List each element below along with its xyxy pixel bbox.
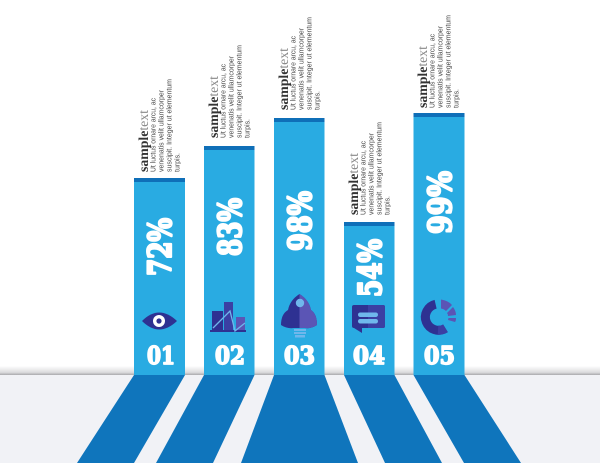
bar 1: 72% [134,178,185,375]
icon: rocket light bulb [281,294,317,338]
caption 2: venenatis velit ullamcorper [228,55,236,138]
caption 4: Ut luctus ornare arcu, ac [360,141,368,215]
caption 4 [347,122,392,215]
caption 1: venenatis velit ullamcorper [158,89,166,172]
icon: bar chart with trend line [210,302,246,332]
caption 2: suscipit. Integer ut elementum [236,45,244,138]
number 02: 02 [215,341,245,370]
caption 1: suscipit. Integer ut elementum [166,79,174,172]
caption 1: turpis. [174,153,182,172]
floor [0,366,600,463]
caption 4: venenatis velit ullamcorper [368,132,376,215]
icon: eye [142,312,177,330]
caption 5: Ut luctus ornare arcu, ac [430,34,436,108]
caption 2 [207,45,252,138]
caption 4: turpis. [384,196,392,215]
caption 4: suscipit. Integer ut elementum [376,122,384,215]
number 05: 05 [424,341,455,370]
floor shadows of bars [77,375,521,463]
caption 5 [416,15,460,108]
caption 5: turpis. [454,89,460,108]
number 04: 04 [353,341,385,370]
icon: speech bubble [352,305,385,333]
caption 3 [277,17,322,110]
percentage 98%: 98% [281,191,319,251]
caption 5: suscipit. Integer ut elementum [446,15,452,108]
bar 4: 54% [344,222,394,375]
caption 2: Ut luctus ornare arcu, ac [220,64,228,138]
icon: segmented donut chart [425,300,456,330]
caption 5: sampletext [416,46,431,108]
number 03: 03 [284,341,315,370]
caption 1: Ut luctus ornare arcu, ac [150,98,158,172]
caption 1 [137,79,182,172]
percentage 72%: 72% [141,218,179,276]
caption 3: turpis. [314,91,322,110]
bar 5: 99% [414,113,464,375]
caption 3: Ut luctus ornare arcu, ac [290,36,298,110]
caption 3: suscipit. Integer ut elementum [306,17,314,110]
caption 1: sampletext [137,110,152,172]
bar 2: 83% [204,146,254,375]
percentage 83%: 83% [211,198,249,256]
caption 2: sampletext [207,76,222,138]
caption 2: turpis. [244,119,252,138]
caption 4: sampletext [347,153,362,215]
number 01: 01 [147,341,175,370]
caption 5: venenatis velit ullamcorper [438,25,444,108]
bar 3: 98% [274,118,324,375]
caption 3: venenatis velit ullamcorper [298,27,306,110]
caption 3: sampletext [277,48,292,110]
percentage 99%: 99% [421,171,459,234]
percentage 54%: 54% [351,239,389,297]
